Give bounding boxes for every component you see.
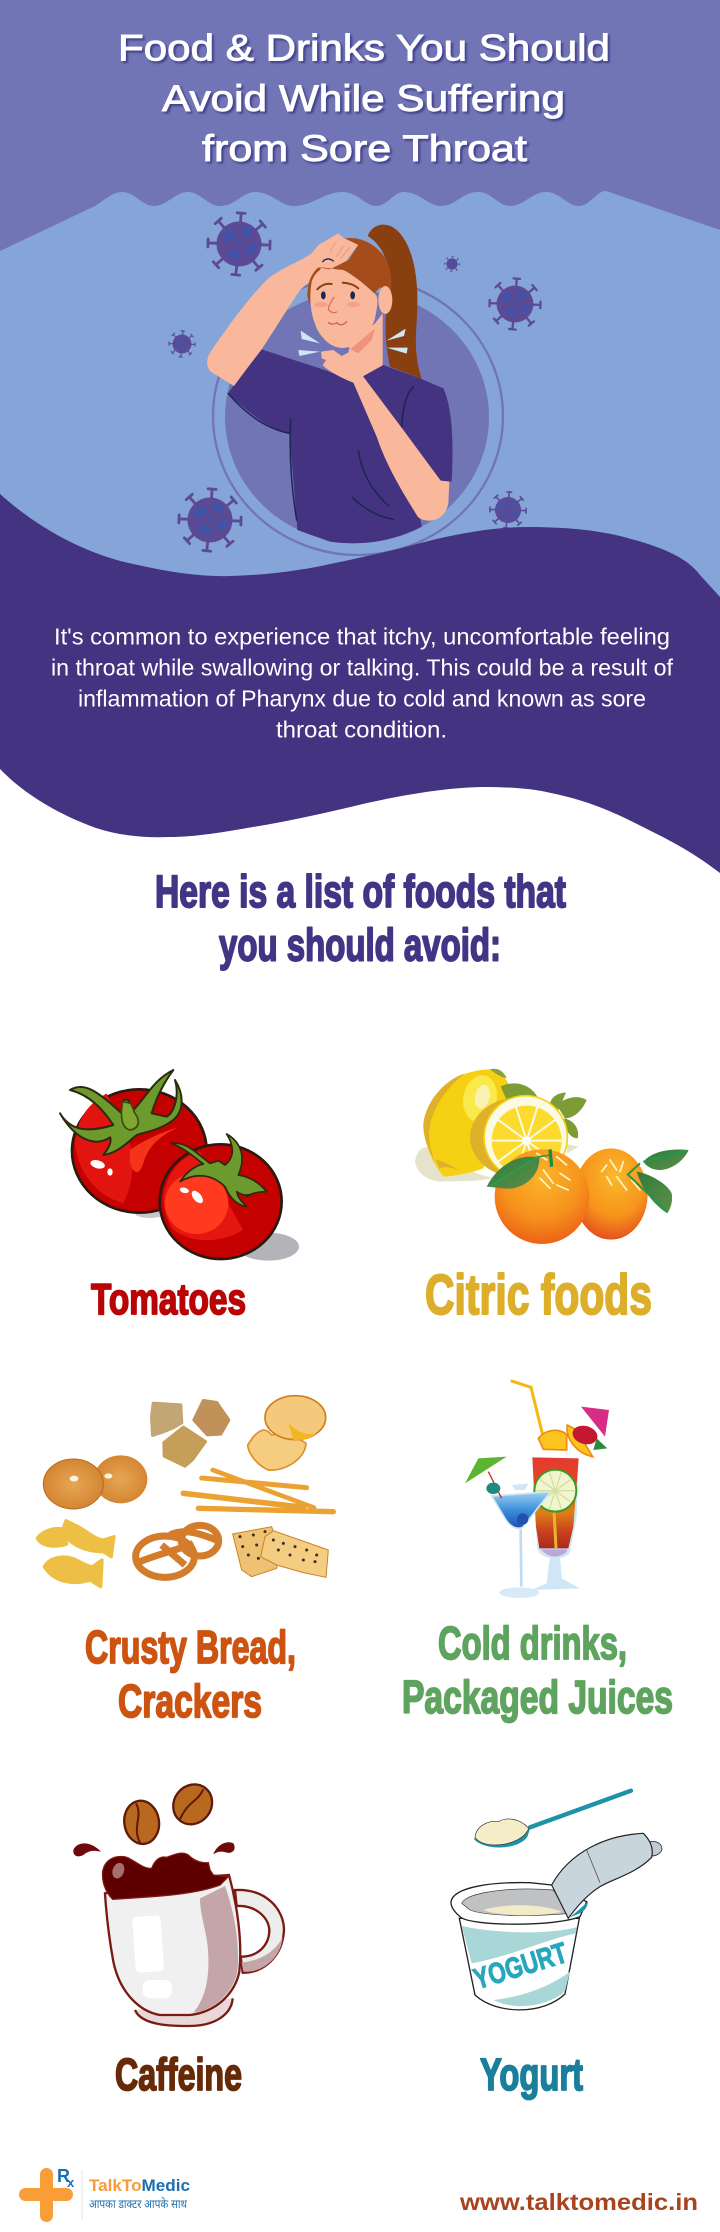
title: Food & Drinks You Should: [118, 28, 610, 68]
orange leaves: [487, 1157, 539, 1189]
brand name: TalkToMedic: [89, 2176, 190, 2195]
intro paragraph: throat condition.: [276, 716, 447, 742]
rx mark: x: [67, 2175, 75, 2190]
dark wave panel: [0, 494, 720, 873]
intro paragraph: in throat while swallowing or talking. This could be a result of: [51, 654, 674, 680]
title: from Sore Throat: [202, 128, 528, 169]
footer website: www.talktomedic.in: [459, 2189, 698, 2215]
coffee beans: [121, 1777, 220, 1846]
shirt folds: [228, 387, 413, 520]
section heading: [155, 866, 566, 970]
tall glass: [532, 1457, 580, 1590]
pain marks: [298, 329, 408, 356]
cup lid: [552, 1833, 652, 1918]
coffee drops: [73, 1842, 235, 1856]
leaves behind lemon slice: [501, 1083, 587, 1138]
pretzels: [136, 1525, 219, 1577]
label: cold drinks, packaged juices: Cold drinks,: [438, 1617, 627, 1669]
icon: coffee mug: [73, 1777, 284, 2026]
raised arm: [207, 233, 358, 386]
lower arm and hand: [321, 350, 449, 521]
small tomato: [160, 1144, 282, 1259]
breadsticks: [183, 1470, 333, 1512]
martini glass: [492, 1483, 551, 1598]
section heading: you should avoid:: [219, 920, 501, 970]
left orange: [495, 1149, 589, 1244]
icon: orange cross: [19, 2168, 73, 2222]
label: yogurt: Yogurt: [480, 2049, 583, 2100]
spoon: [474, 1791, 631, 1847]
icon: citric fruits: [415, 1069, 689, 1244]
icon: yogurt cup and spoon: [451, 1791, 662, 2010]
pink umbrella: [581, 1407, 609, 1437]
neck shadow: [350, 328, 375, 353]
mug body: [105, 1875, 240, 2015]
illustration: woman with sore throat: [207, 225, 503, 555]
light blue wave panel: [0, 191, 720, 620]
small calyx: [172, 1134, 267, 1207]
intro paragraph: inflammation of Pharynx due to cold and known as sore: [78, 686, 646, 712]
bagel chips: [43, 1455, 147, 1509]
divider: [82, 2170, 83, 2220]
section heading: Here is a list of foods that: [155, 866, 566, 917]
mug highlights: [132, 1915, 172, 1998]
intro paragraph: It's common to experience that itchy, uncomfortable feeling: [54, 624, 670, 650]
seeded crackers: [233, 1527, 328, 1577]
title: Avoid While Suffering: [162, 78, 565, 119]
whole lemon: [423, 1069, 508, 1177]
straw: [511, 1381, 543, 1435]
large tomato: [72, 1089, 207, 1213]
lime slice: [534, 1470, 576, 1512]
fruit garnish: [538, 1423, 607, 1457]
facial features: [314, 242, 360, 325]
label: caffeine: Caffeine: [115, 2049, 242, 2100]
title: [118, 28, 610, 169]
right orange: [574, 1148, 648, 1240]
ponytail: [368, 225, 422, 379]
label: crusty bread, crackers: Crusty Bread,: [85, 1621, 296, 1673]
bread slices: [248, 1396, 326, 1470]
cup contents: [462, 1889, 570, 1916]
label: cold drinks, packaged juices: [402, 1617, 673, 1723]
label: crusty bread, crackers: [85, 1621, 296, 1727]
saucer: [135, 1998, 233, 2026]
background circle: [213, 277, 503, 555]
rx mark: R: [57, 2166, 70, 2186]
cup lettering: YOGURT: [470, 1936, 571, 1996]
shirt: [228, 349, 453, 543]
coffee splash: [103, 1853, 228, 1899]
fish crackers: [37, 1521, 114, 1587]
label: tomatoes: Tomatoes: [91, 1275, 246, 1324]
ear: [378, 286, 392, 314]
face: [310, 269, 377, 348]
virus particles: [169, 213, 541, 551]
intro paragraph: [51, 624, 674, 742]
cup rim: [451, 1883, 587, 1924]
icon: tomatoes: [60, 1070, 299, 1261]
lemon slice: [470, 1097, 567, 1177]
green umbrella: [465, 1457, 507, 1498]
hair: [307, 238, 391, 305]
lid tab: [650, 1841, 662, 1856]
cup bands: [462, 1926, 577, 2006]
hindi tagline: आपका डाक्टर आपके साथ: [89, 2197, 187, 2211]
label: crusty bread, crackers: Crackers: [118, 1675, 262, 1727]
icon: cold drinks: [465, 1381, 609, 1598]
cup body: [459, 1918, 579, 2010]
icon: crusty bread and crackers: [37, 1396, 333, 1587]
large calyx: [60, 1070, 182, 1155]
handle: [235, 1890, 284, 1973]
croutons: [152, 1401, 229, 1466]
header background: [0, 0, 720, 300]
footer logo: [19, 2166, 190, 2222]
neck: [345, 313, 383, 378]
